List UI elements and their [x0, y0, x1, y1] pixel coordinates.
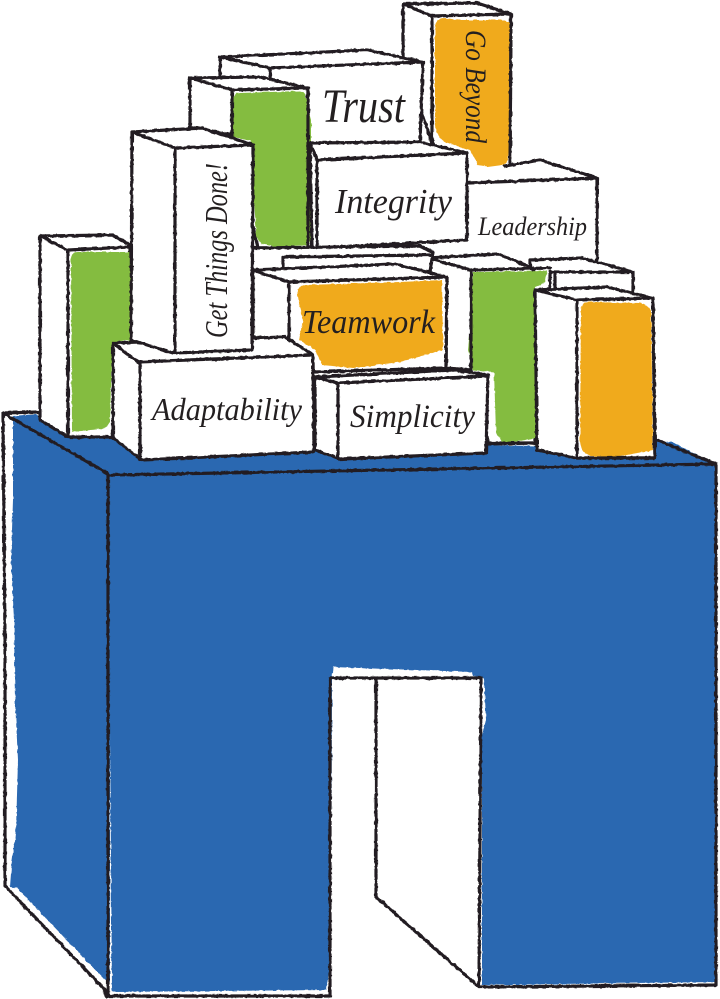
label: trust: Trust [322, 80, 406, 133]
block: green right [428, 254, 550, 444]
label: simplicity: Simplicity [350, 399, 475, 435]
block: simplicity [315, 370, 488, 459]
block: leadership [465, 160, 597, 262]
block: teamwork [253, 264, 447, 372]
block: orange right [535, 287, 655, 458]
label: get things done: Get Things Done! [198, 163, 234, 338]
outline: building [3, 412, 716, 996]
block: go beyond [403, 3, 512, 172]
block: adaptability [113, 337, 314, 460]
label: leadership: Leadership [477, 212, 587, 241]
block: small right back [530, 258, 633, 296]
block: green left [40, 235, 130, 437]
block: integrity [310, 142, 467, 248]
block: thin teamwork back [252, 246, 433, 272]
label: go beyond: Go Beyond [459, 30, 492, 144]
face: left side [10, 416, 110, 982]
face: top [13, 414, 716, 480]
label: teamwork: Teamwork [302, 304, 436, 341]
label: adaptability: Adaptability [150, 391, 303, 427]
block: green back [190, 77, 311, 248]
opening: doorway [330, 678, 481, 996]
table: blue building [3, 412, 716, 996]
label: integrity: Integrity [334, 182, 452, 221]
block: get things done [131, 128, 253, 353]
block: trust [220, 50, 423, 146]
face: front [108, 464, 716, 992]
